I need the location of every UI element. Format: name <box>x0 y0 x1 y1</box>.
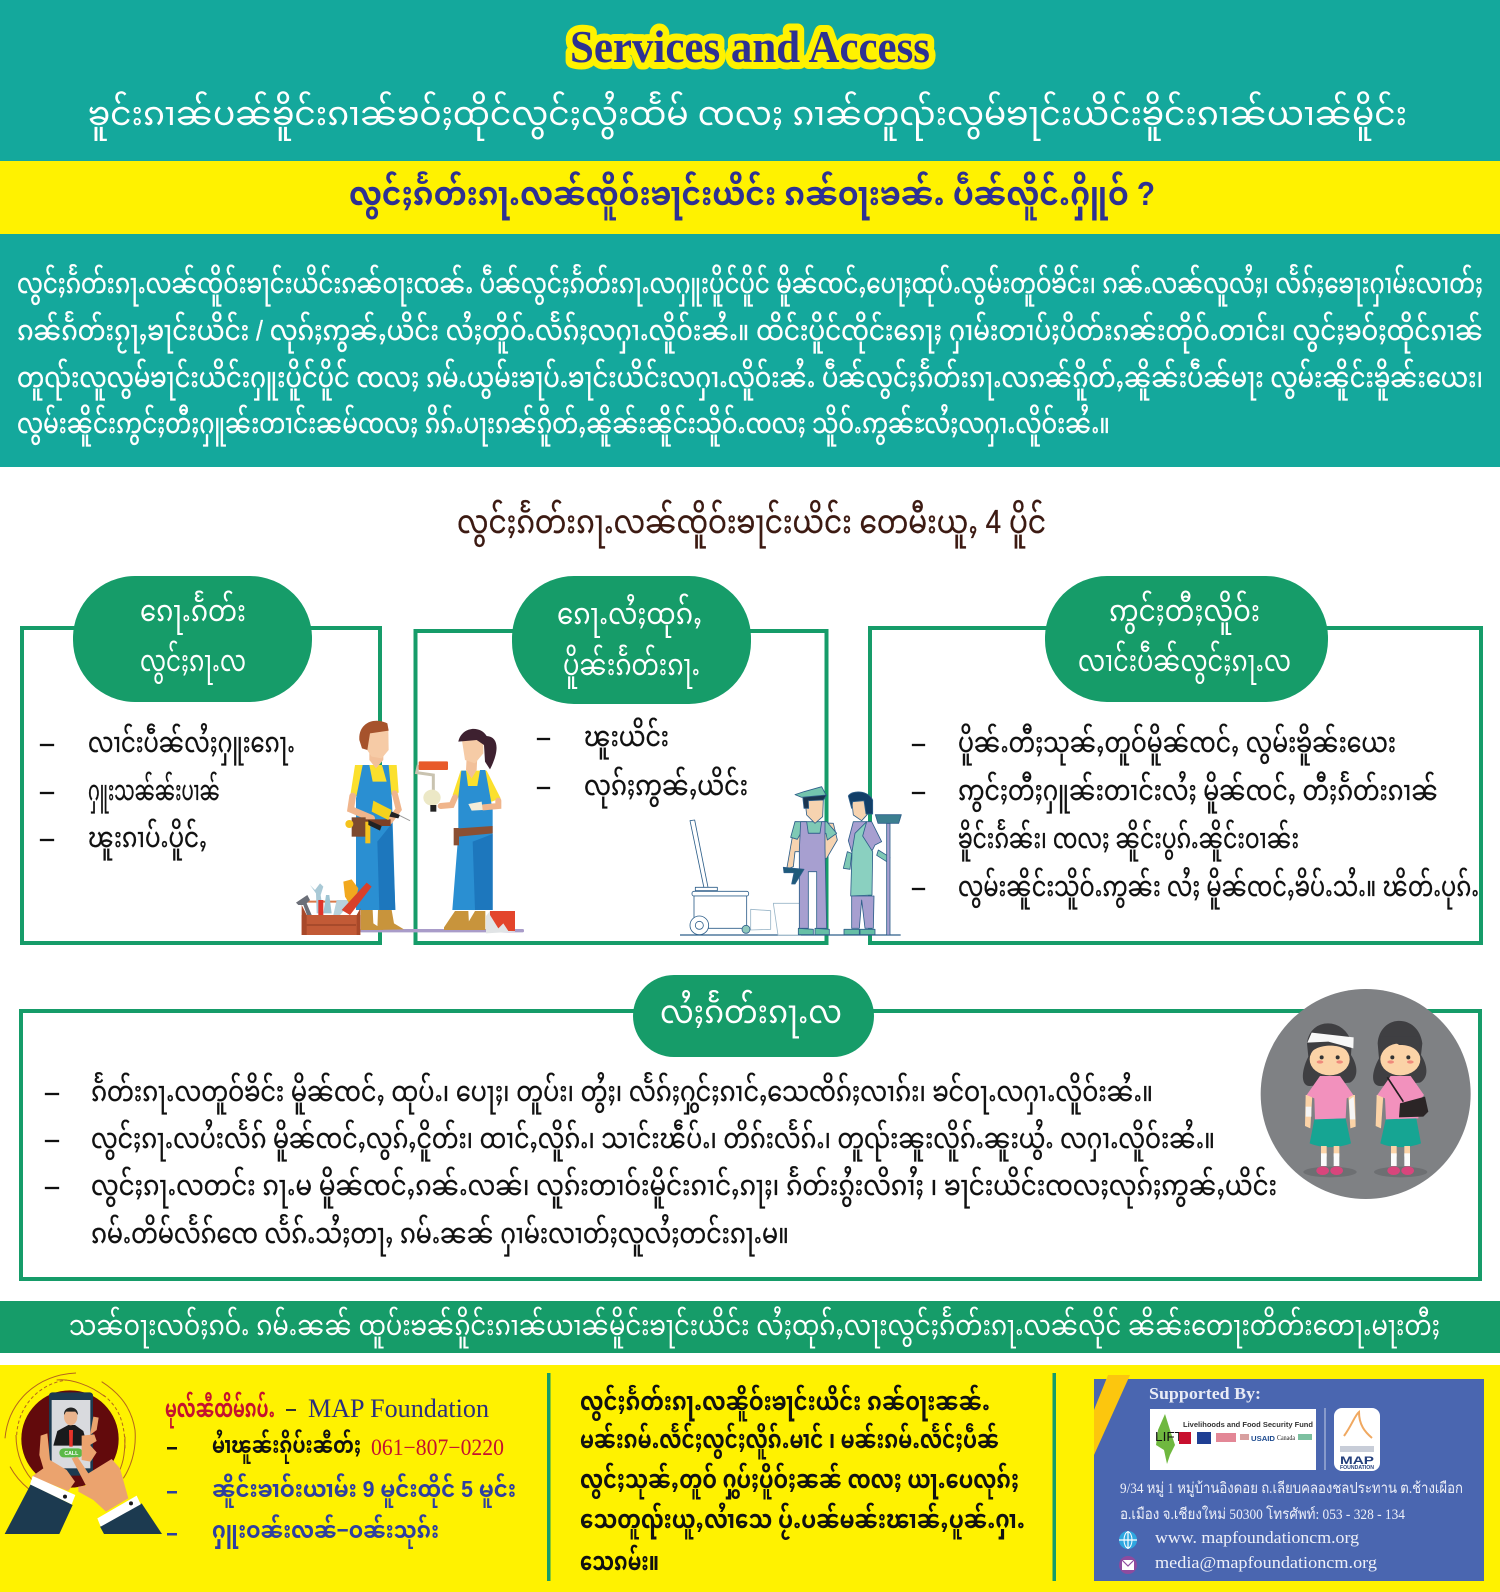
list 3: ၶိူင်းၵႅၼ်း၊ ၸလႈ ၼိူင်းပွၵ်ႉၼိူင်းဝၢၼ်း <box>958 820 1299 861</box>
subtitle: ၶူင်းၵၢၼ်ပၼ်ၶိူင်းၵၢၼ်ၶဝ်ႈထိုင်လွင်ႈလွႆးထႅမ် ၸလႈ ၵၢၼ်တူၺ်းလွမ်ၶႃင်းယိင်းၶိူင်းၵၢၼ်ယၢၼ်မိူင်း <box>88 89 1407 141</box>
advice text: လွင်ႈၵႅတ်းၵႃႉလၼိူဝ်းၶႃင်းယိင်း ၵၼ်ဝႃးၼၼ်ႉ <box>580 1384 990 1422</box>
MAP Foundation logo: MAP <box>1340 1455 1374 1467</box>
LIFT logo card: LIFT <box>1155 1429 1183 1444</box>
girl with head bandage <box>1303 1023 1356 1175</box>
shadows <box>1303 1167 1357 1177</box>
panel: box 4 injury <box>21 975 1480 1279</box>
list 1: ႁူးသၼ်ၼ်းပၢၼ် <box>88 772 220 813</box>
list 1: လၢင်းပဵၼ်လႆႈႁူးၵေႃႉ <box>88 724 295 765</box>
floor shadow <box>360 929 524 932</box>
pill heading 3: လၢင်းပဵၼ်လွင်ႈၵႃႉလ <box>1078 639 1291 686</box>
paint roller <box>417 765 433 792</box>
divider left <box>547 1373 550 1581</box>
arms <box>441 797 455 806</box>
panel: box 3 workplace <box>870 576 1481 943</box>
heading: four types: လွင်ႈၵႅတ်းၵႃႉလၼ်ၸိူဝ်းၶႃင်းယိင်း တေမီးယူႇ 4 ပိူင် <box>457 499 1046 548</box>
MAP Foundation logo: FOUNDATION <box>1340 1465 1374 1471</box>
worker: man <box>345 721 410 930</box>
website: www. mapfoundationcm.org <box>1155 1528 1360 1547</box>
advice text: သေတူၺ်းယူႇလႆၢသေ ပႂ်ႉပၼ်မၼ်းၽၢၼ်ႇပူၼ်ႉႁၢႉ <box>580 1502 1025 1540</box>
list 4: ၵမ်ႉတိမ်လႅၵ်ၸေ လႅၵ်ႉသႆႈတႃႇ ၵမ်ႉၼၼ် ႁၢမ်းလၢတ်ႈလူလႆႈတင်းၵႃႉမ။ <box>91 1215 789 1256</box>
pill heading 1: လွင်ႈၵႃႉလ <box>140 639 246 686</box>
left hand <box>32 1433 75 1491</box>
illustration: injured girls <box>1261 989 1471 1199</box>
advice text: လွင်ႈသုၼ်ႇတူဝ် ႁွပ်ႈပိူဝ်ႈၼၼ် ၸလႈ ယႃႉပေလုၵ်ႈ <box>580 1462 1019 1500</box>
paragraph <box>17 265 1483 446</box>
icon: email <box>1119 1556 1137 1574</box>
phone: CALL <box>64 1451 79 1457</box>
boots <box>444 911 485 930</box>
icon: phone call in hands <box>5 1373 162 1534</box>
arms <box>351 796 372 818</box>
list 3: ပိူၼ်ႉတီႈသုၼ်ႇတူဝ်မိူၼ်ၸင်ႇ လွမ်းၶိူၼ်းယေး <box>958 724 1396 765</box>
list 2: လုၵ်ႈဢွၼ်ႇယိင်း <box>584 767 748 808</box>
LIFT logo card <box>1150 1409 1316 1470</box>
title: Services and Access <box>570 22 930 72</box>
MAP Foundation logo <box>1334 1408 1380 1471</box>
phone <box>49 1392 93 1476</box>
right sleeve <box>100 1503 162 1534</box>
panel: green call-to-action band <box>0 1301 1500 1353</box>
address <box>1120 1480 1463 1523</box>
cleaner: woman <box>843 792 901 935</box>
illustration: construction worker and toolbox <box>296 721 524 935</box>
pill heading 1 <box>73 576 312 702</box>
girl with arm sling <box>1373 1021 1428 1175</box>
list 3 <box>912 724 1479 909</box>
hours: ၼိူင်းၶၢဝ်းယၢမ်း 9 မူင်းထိုင် 5 မူင်း <box>212 1473 516 1508</box>
list 4: လွင်ႈၵႃႉလတင်း ၵႃႉမ မိူၼ်ၸင်ႇၵၼ်ႉလၼ်၊ လူၵ်းတၢဝ်းမိူင်းၵၢင်ႇၵႃႈ၊ ၵႅတ်းၵွႆးလိၵၢႆႈ ၊ ၶႃင်းယိင်းၸလႈလုၵ်ႈဢွၼ်ႇယိင်း <box>91 1167 1277 1208</box>
pill heading 1: ၵေႃႉၵႅတ်း <box>140 589 246 636</box>
panel: yellow footer <box>0 1365 1500 1592</box>
paint can <box>486 911 515 933</box>
advice text: သေၵမ်း။ <box>580 1544 659 1576</box>
left sleeve <box>5 1484 73 1534</box>
organisation name <box>165 1391 489 1429</box>
address: อ.เมือง จ.เชียงใหม่ 50300 โทรศัพท์: 053 - 328 - 134 <box>1120 1505 1405 1523</box>
phone number: မႆၢၽူၼ်းၵိုပ်းၼီတ်ႈ <box>212 1429 361 1464</box>
list 1: ၽူးၵၢပ်ႉပိူင်ႇ <box>88 819 207 860</box>
contact details <box>165 1391 516 1549</box>
LIFT logo card: Livelihoods and Food Security Fund <box>1183 1422 1313 1429</box>
boots <box>361 910 404 930</box>
list 4: ၵႅတ်းၵႃႉလတူဝ်ၶိင်း မိူၼ်ၸင်ႇ ထုပ်ႉ၊ ပေႃႈ၊ တူပ်း၊ တွႆႈ၊ လႅၵ်ႈႁွင်ႈၵၢင်ႇသေၸိၵ်ႈလၢၵ်း၊ ၶင်ဝႃႉလႁၢႉလိူဝ်းၼႆႉ။ <box>91 1073 1153 1114</box>
days: ႁူးဝၼ်းလၼ်−ဝၼ်းသုၵ်း <box>212 1514 439 1549</box>
pill heading 2 <box>512 576 751 704</box>
panel: introduction text <box>0 234 1500 467</box>
drill <box>372 801 392 820</box>
pill heading 3: ဢွင်ႈတီႈလိူဝ်း <box>1109 589 1260 636</box>
grey circle <box>1261 989 1471 1199</box>
broom <box>887 823 890 935</box>
phone number <box>167 1429 504 1464</box>
pill heading 3 <box>1045 576 1328 702</box>
belt <box>458 826 493 837</box>
yellow accent <box>1094 1375 1130 1455</box>
toolbox <box>296 879 372 935</box>
organisation name: မုလ်ၼီထိမ်ၵပ်ႉ <box>165 1391 275 1429</box>
pill heading 4: လႆႈၵႅတ်းၵႃႉလ <box>660 989 842 1038</box>
mop and bucket <box>690 820 801 935</box>
paragraph: လွမ်းၼိူင်းဢွင်ႈတီႈႁူၼ်းတၢင်းၼမ်ၸလႈ ၵိၵ်ႉပႃးၵၼ်ၵိူတ်ႇၼိူၼ်းၼိူင်းသိူဝ်ႉၸလႈ သိူဝ်ႉဢွၼ်ႊလႆႈလႁၢႉလိူဝ်းၼႆႉ။ <box>17 405 1110 446</box>
list 4 <box>45 1073 1277 1256</box>
icon: web <box>1119 1531 1137 1549</box>
rings <box>5 1373 135 1500</box>
list 2: ၽူးယိင်း <box>584 718 669 759</box>
list 1 <box>40 724 295 860</box>
phone number: 061−807−0220 <box>371 1435 504 1460</box>
panel: box 1 physical <box>22 576 380 943</box>
divider right <box>1052 1373 1056 1581</box>
pill heading 2: ၵေႃႉလႆႈထုၵ်ႇ <box>557 592 702 639</box>
advice text: မၼ်းၵမ်ႉလႅင်ႈလွင်ႈလိူၵ်ႉမၢင် ၊ မၼ်းၵမ်ႉလႅင်ႈပဵၼ် <box>580 1422 999 1460</box>
dark red disc <box>21 1390 119 1488</box>
organisation name: MAP Foundation <box>308 1394 489 1423</box>
divider <box>1324 1408 1326 1470</box>
panel: box 2 mental <box>416 576 826 943</box>
advice text <box>580 1384 1025 1576</box>
panel: header <box>0 0 1500 161</box>
LIFT logo card: USAID <box>1251 1436 1275 1443</box>
email: media@mapfoundationcm.org <box>1155 1553 1378 1572</box>
supported by label: Supported By: <box>1149 1384 1261 1403</box>
list 4: လွင်ႈၵႃႉလပႆးလႅၵ် မိူၼ်ၸင်ႇလွၵ်ႇငိူတ်း၊ ထၢင်ႇလိူၵ်ႉ၊ သၢင်းၽဵပ်ႉ၊ တိၵ်းလႅၵ်ႉ၊ တူၺ်းၼူးလိူၵ်ႉၼူးယွႆႉ လႁၢႉလိူဝ်းၼႆႉ။ <box>91 1120 1215 1161</box>
pill heading 4 <box>633 975 874 1057</box>
cleaner: man <box>783 787 837 935</box>
heading: question: လွင်ႈၵႅတ်းၵႃႉလၼ်ၸိူဝ်းၶႃင်းယိင်း ၵၼ်ဝႃးၶၼ်ႉ ပဵၼ်လိူင်ႉႁိူဝ် ? <box>349 171 1155 220</box>
LIFT logo card: Canada <box>1277 1434 1296 1442</box>
list 2 <box>537 718 748 808</box>
worker: woman painter <box>417 729 501 930</box>
right hand <box>72 1457 128 1512</box>
panel: supported by <box>1094 1375 1484 1581</box>
tool belt <box>353 819 391 826</box>
pill heading 2: ပိူၼ်းၵႅတ်းၵႃႉ <box>563 643 700 690</box>
panel: yellow question band <box>0 161 1500 234</box>
illustration: cleaning workers <box>680 787 901 935</box>
floor line <box>680 933 901 937</box>
address: 9/34 หมู่ 1 หมู่บ้านอิงดอย ถ.เลียบคลองชลประทาน ต.ช้างเผือก <box>1120 1480 1463 1497</box>
